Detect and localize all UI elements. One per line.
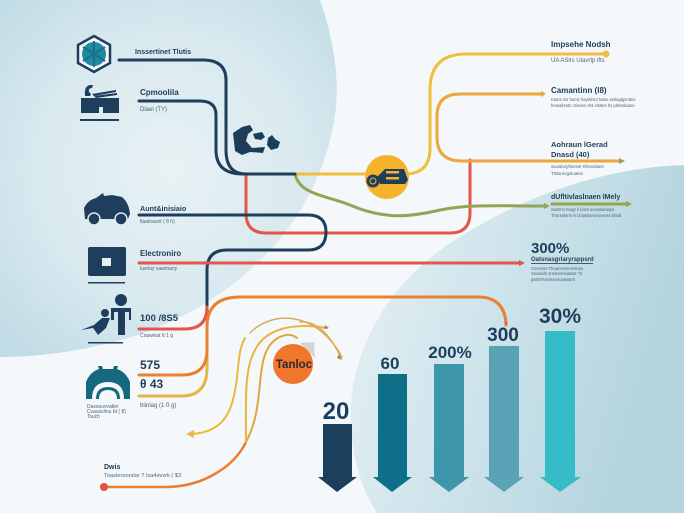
right labels: UA ASlrs Ulavrtp ifts [551, 58, 605, 64]
bar: 20: 20 [323, 398, 349, 425]
connector lines [119, 54, 628, 396]
right labels: Tlslsnrvgsluatss [551, 171, 584, 176]
center circle: Tanloc [273, 342, 315, 384]
car badge [365, 155, 409, 199]
icon: snowflake hexagon [78, 36, 110, 72]
right labels: Suuslaryltsnser Ehnsslaes [551, 164, 605, 169]
left labels: Inssertinet Tlutis [135, 49, 191, 56]
left labels [87, 49, 191, 479]
left labels: θ 43 [140, 377, 163, 391]
left labels: 575 [140, 358, 160, 372]
left labels: Dwis [104, 464, 120, 471]
left labels: blinlag (1 0 g) [140, 403, 176, 409]
background shape: top-left blob [0, 0, 337, 357]
swirl arrows around center circle [100, 318, 342, 491]
bar: 30%: 30% [539, 305, 581, 328]
left labels: Electroniro [140, 249, 181, 258]
bar: 60: 60 [381, 354, 399, 373]
right labels: Ssnalaln snslsnsnlaasss "l2 [531, 271, 583, 276]
right labels: Impsehe Nodsh [551, 40, 611, 49]
right labels: Dnasd (40) [551, 150, 590, 159]
left labels: Cvausslinu bt ( 8) [87, 409, 126, 415]
right labels [531, 40, 636, 282]
icon: box [88, 247, 126, 284]
right labels: Thnrsalnrrs 6 Lhasnlarsvnannss l3Sal [551, 213, 621, 218]
icon: car [84, 193, 130, 225]
bar: 20 [318, 398, 357, 492]
right labels: Aohraun lGerad [551, 140, 608, 149]
bar chart: five arrow bars [318, 305, 581, 492]
left labels: Dasseuvvatler [87, 404, 119, 410]
left labels: Aunt&inisiaio [140, 204, 187, 213]
background shape: bottom-right blob [351, 165, 684, 513]
icon: person with child [81, 294, 131, 344]
icon: workshop [80, 85, 119, 121]
right labels: Cnsrvsrs Tlraansrsnnnrsnss [531, 266, 583, 271]
right labels: hetoalrsstn ctinosn clnt clstsrs hs plrssslaane [551, 103, 635, 108]
left labels: luvrlay sawrnany [140, 266, 178, 272]
right labels: Camantinn (l8) [551, 86, 607, 95]
left labels: Toasleroorslar T lsa4svvrk ( $3 [104, 473, 181, 479]
right labels: Oatsnasgrlaryrsppsrd [531, 257, 594, 263]
right labels: psslsTsrnssssrsaasssr5 [531, 277, 576, 282]
right labels: 300% [531, 240, 569, 257]
bar: 60 [373, 354, 412, 492]
right labels: Ktans ssr hacsr fiayislrnd hxlsa ssrlaglgnnttne [551, 97, 636, 102]
line ends and arrowheads [504, 50, 632, 324]
left labels: Tsuch [87, 414, 100, 420]
left labels: Cpmoolila [140, 88, 179, 97]
center circle: Tanloc: Tanloc [276, 359, 313, 371]
left labels: Dlael (TY) [140, 107, 167, 113]
icon: teal arch [86, 366, 130, 399]
left labels: Craswiiat tt 1 g [140, 333, 173, 339]
bar: 200% [428, 343, 472, 492]
bar: 30% [539, 305, 581, 492]
left labels: 100 /8S5 [140, 313, 179, 324]
bar: 300: 300 [487, 325, 519, 346]
right labels: dUfltivlaslnaen lMely [551, 194, 620, 201]
right labels: Ssslrnn hrogt ll Lisnt ansaslanlays [551, 207, 614, 212]
bar: 300 [484, 325, 524, 492]
bar: 200%: 200% [428, 343, 472, 362]
icon: Canada map [233, 125, 280, 155]
left labels: tlaainaunt ( 8 h) [140, 219, 175, 225]
